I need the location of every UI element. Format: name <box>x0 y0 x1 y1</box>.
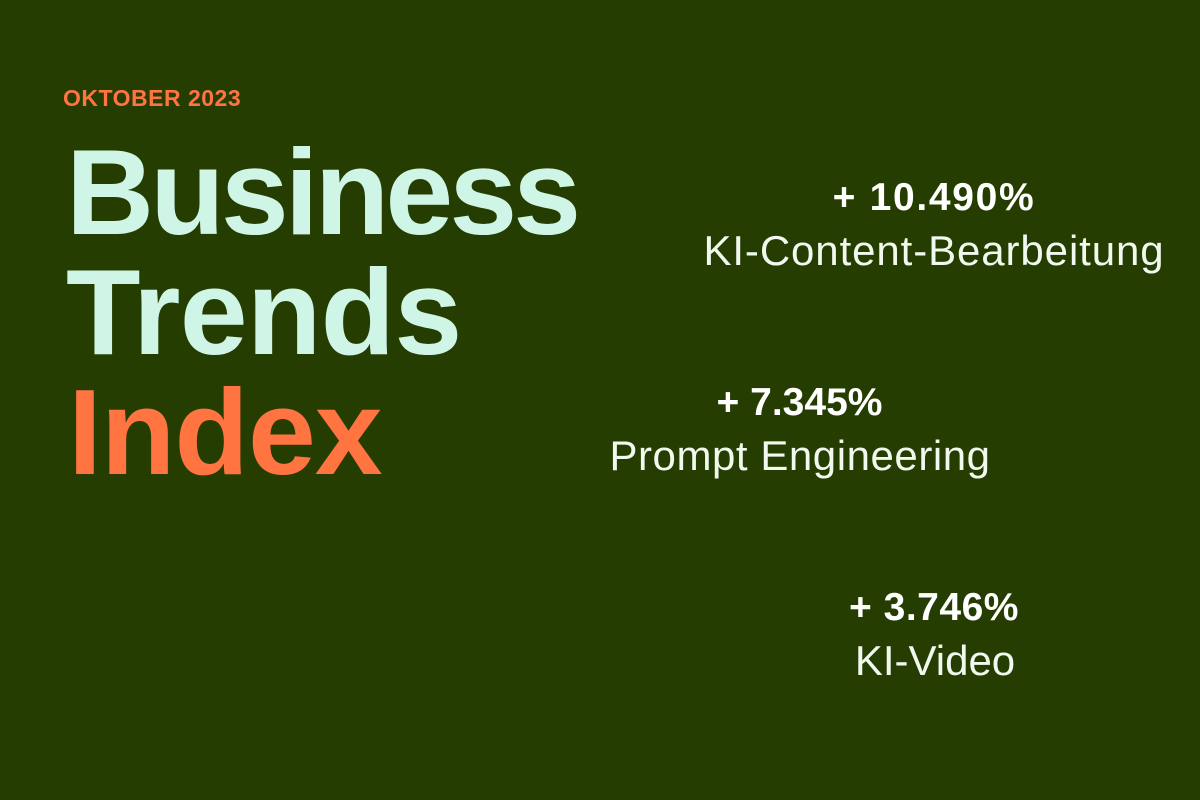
title line: Business: Business <box>66 124 577 260</box>
stat value: + 3.746% <box>849 586 1019 629</box>
stat label: KI-Video <box>855 637 1015 684</box>
title <box>66 124 577 500</box>
title line: Index: Index <box>68 364 382 500</box>
stat: KI-Content-Bearbeitung <box>703 176 1165 274</box>
stat label: Prompt Engineering <box>609 432 991 479</box>
stat: KI-Video <box>849 586 1019 684</box>
stat value: + 7.345% <box>717 381 882 424</box>
date label: OKTOBER 2023 <box>63 85 241 111</box>
stat label: KI-Content-Bearbeitung <box>703 227 1165 274</box>
title line: Trends: Trends <box>66 244 462 380</box>
stat: Prompt Engineering <box>609 381 991 479</box>
stat value: + 10.490% <box>833 176 1035 219</box>
